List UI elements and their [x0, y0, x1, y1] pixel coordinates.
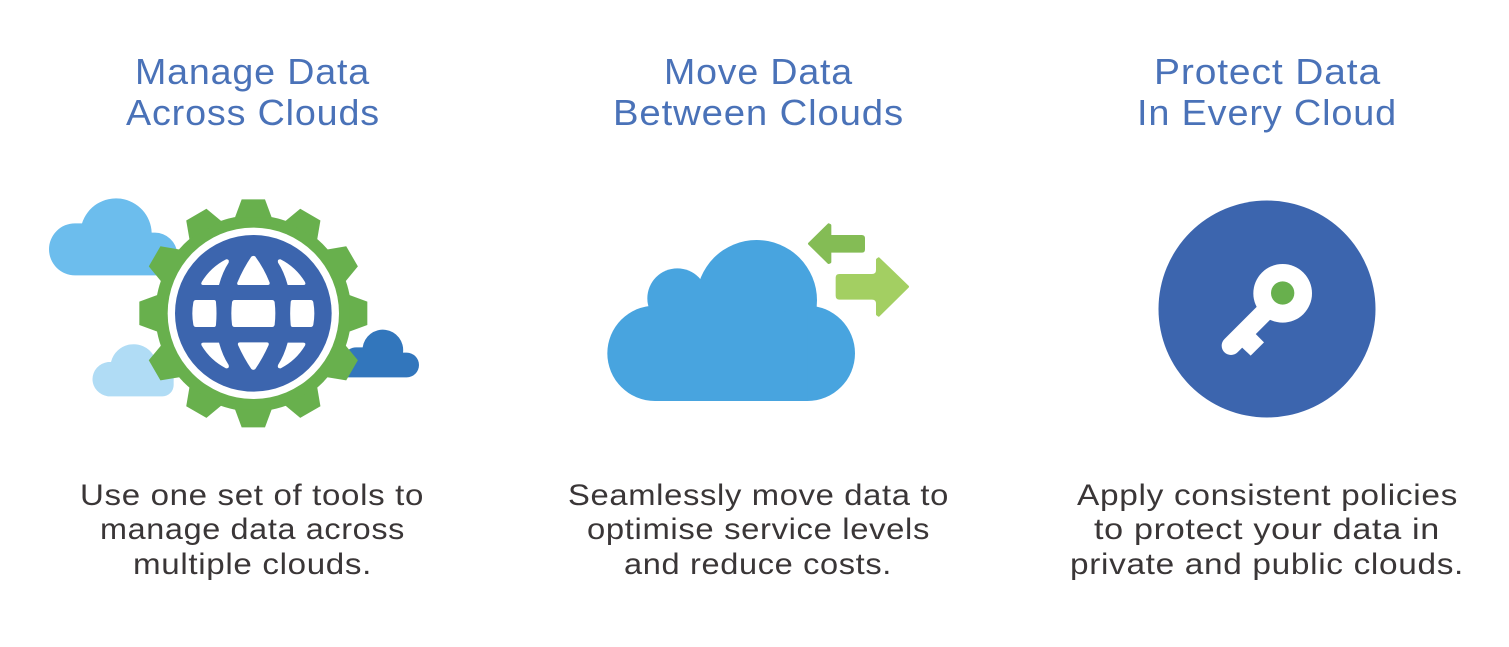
icon: pale blue cloud: [92, 344, 174, 396]
icon: large light blue cloud: [49, 198, 177, 275]
text block: manage description: multiple clouds.: [133, 548, 372, 581]
icon: dark blue cloud: [344, 330, 419, 377]
icon: blue cloud: [607, 240, 855, 401]
text block: manage description: manage data across: [100, 513, 405, 546]
heading: protect data: [1137, 51, 1397, 133]
text block: manage description: Use one set of tools to: [80, 479, 424, 512]
heading: manage data: [126, 51, 380, 133]
heading: move data: [613, 51, 904, 133]
icon: green gear: [139, 199, 367, 427]
text block: move description: and reduce costs.: [624, 548, 892, 581]
icon: light green right arrow: [837, 259, 908, 315]
text block: protect description: [1070, 479, 1464, 581]
text block: move description: Seamlessly move data to: [568, 479, 949, 512]
heading: move data: Between Clouds: [613, 92, 904, 133]
text block: protect description: Apply consistent policies: [1077, 479, 1458, 512]
heading: move data: Move Data: [664, 51, 853, 92]
text block: protect description: to protect your data in: [1094, 513, 1440, 546]
icon: blue circle with key: [1158, 200, 1376, 418]
icon: gear with globe and clouds: [49, 198, 419, 427]
text block: manage description: [80, 479, 424, 581]
icon: white ring: [168, 228, 339, 399]
heading: manage data: Manage Data: [135, 51, 370, 92]
heading: protect data: Protect Data: [1154, 51, 1381, 92]
text block: protect description: private and public clouds.: [1070, 548, 1464, 581]
icon: cloud with transfer arrows: [607, 225, 908, 401]
icon: white key: [1231, 264, 1312, 356]
icon: blue globe: [175, 235, 332, 392]
heading: protect data: In Every Cloud: [1137, 92, 1397, 133]
icon: dark green left arrow: [809, 225, 864, 263]
heading: manage data: Across Clouds: [126, 92, 380, 133]
text block: move description: [568, 479, 949, 581]
text block: move description: optimise service levels: [587, 513, 930, 546]
